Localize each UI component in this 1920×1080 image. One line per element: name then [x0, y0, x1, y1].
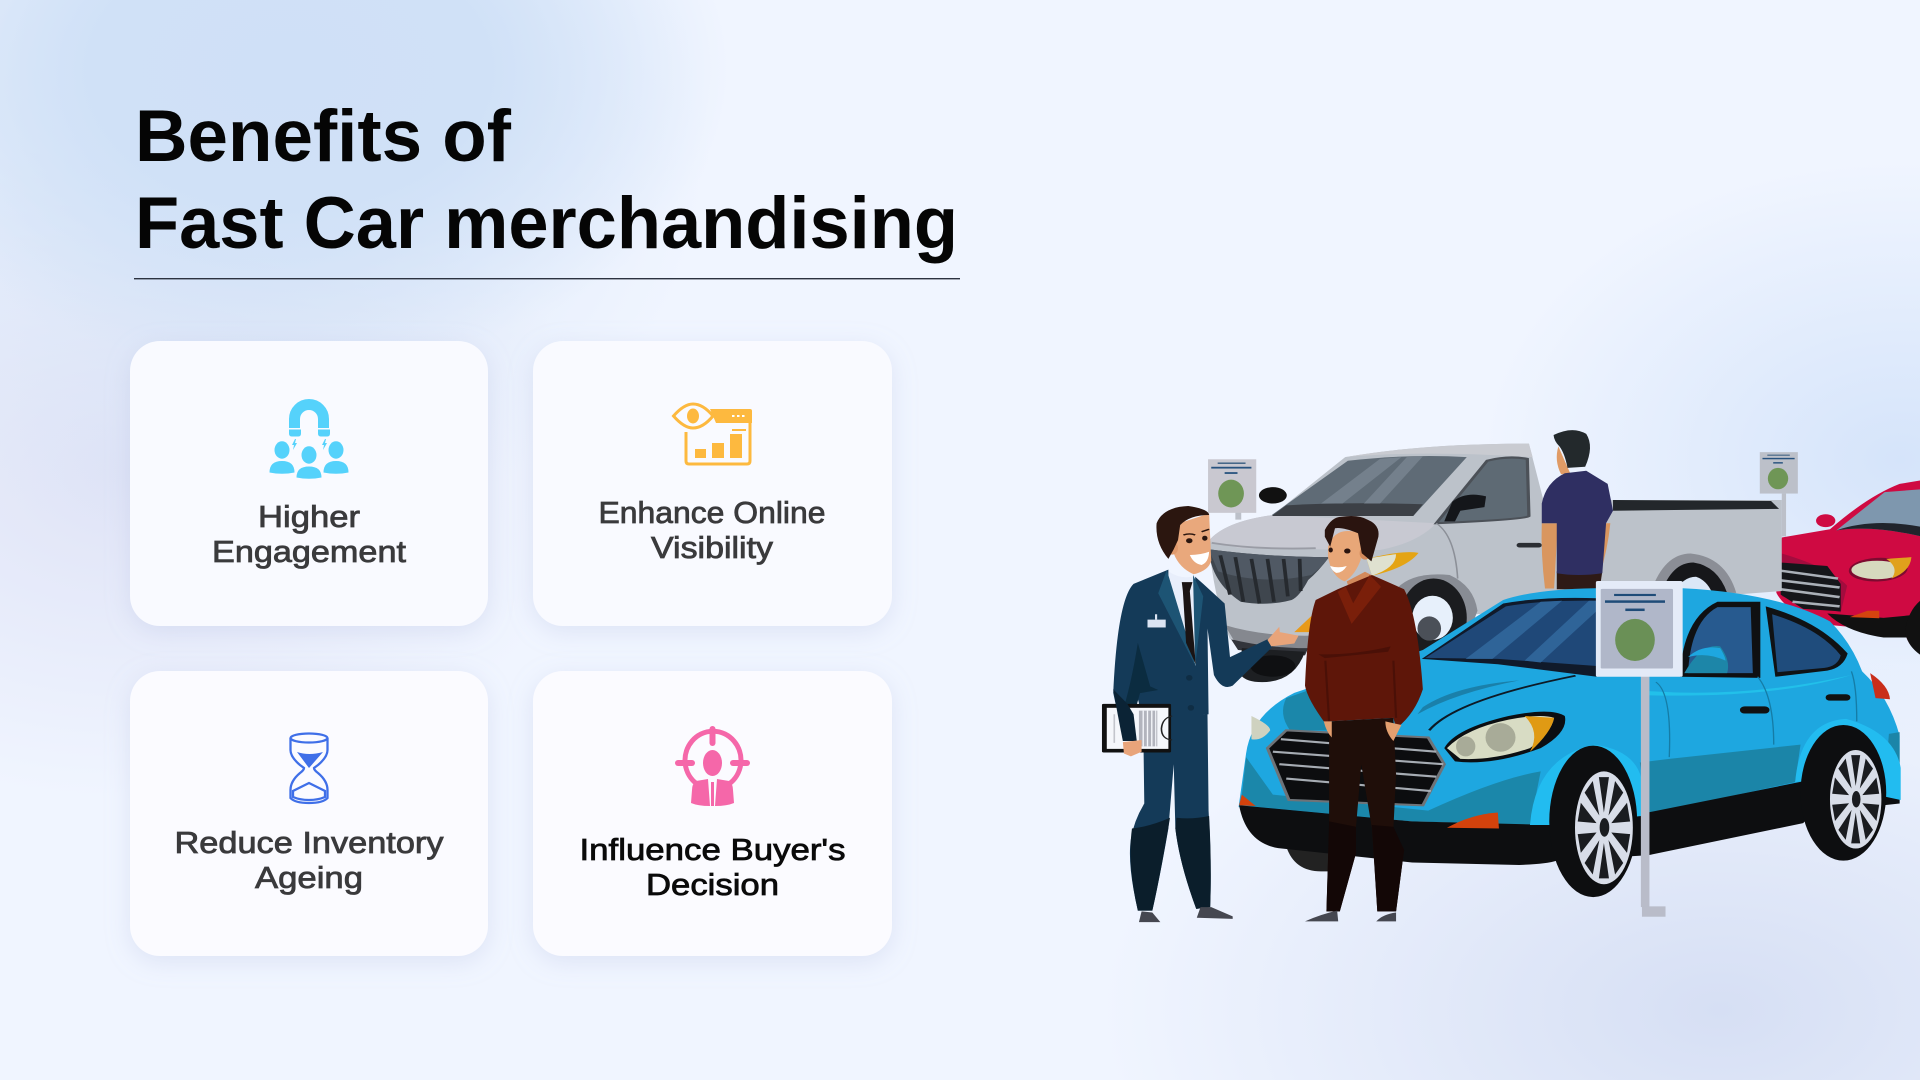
- panel: Enhance Online Visibility: [533, 341, 892, 626]
- label: Enhance Online: [598, 495, 826, 530]
- label: [212, 499, 406, 569]
- panel: Reduce Inventory Ageing: [130, 671, 488, 956]
- blue car: [1239, 588, 1901, 897]
- icon: hourglass: [290, 734, 328, 803]
- label: [598, 495, 826, 565]
- icon: eye and chart window: [674, 404, 752, 464]
- grey pickup truck: [1209, 444, 1782, 682]
- label: [580, 832, 846, 902]
- label: Higher: [258, 499, 360, 534]
- person: salesman: [1102, 506, 1299, 922]
- small sale sign: red car: [1760, 452, 1798, 536]
- icon: magnet attracting people: [270, 404, 348, 479]
- red car: [1776, 480, 1920, 655]
- panel: Higher Engagement: [130, 341, 488, 626]
- label: Ageing: [255, 860, 363, 895]
- title underline: [134, 278, 960, 279]
- label: Influence Buyer's: [580, 832, 846, 867]
- title: [135, 96, 958, 264]
- label: Engagement: [212, 534, 406, 569]
- icon: clipboard: [1102, 704, 1172, 752]
- panel: Influence Buyer's Decision: [533, 671, 892, 956]
- person: man viewing truck: [1542, 430, 1613, 589]
- label: Reduce Inventory: [174, 825, 444, 860]
- label: Decision: [646, 867, 779, 902]
- illustration: car dealership scene: [1102, 430, 1920, 922]
- label: [174, 825, 444, 895]
- large sale sign: [1596, 581, 1683, 917]
- title: Benefits of: [135, 96, 512, 177]
- icon: target on person: [675, 726, 750, 806]
- label: Visibility: [651, 530, 774, 565]
- small sale sign: truck: [1208, 459, 1256, 520]
- person: customer: [1305, 516, 1423, 921]
- title: Fast Car merchandising: [135, 183, 958, 264]
